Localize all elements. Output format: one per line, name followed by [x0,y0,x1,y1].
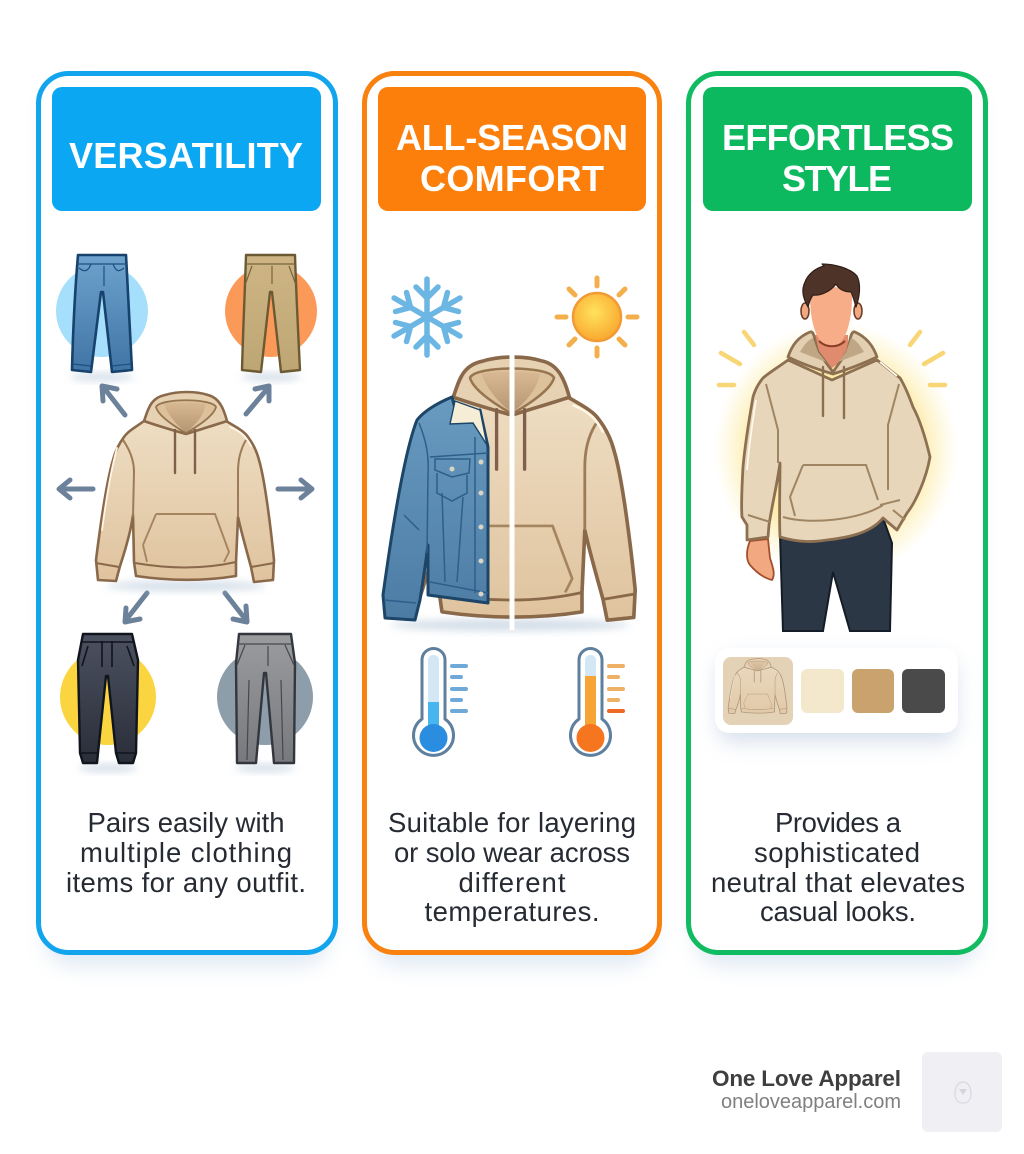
brand name: One Love Apparel [712,1066,901,1091]
logo tile [922,1052,1002,1132]
icon: hoodie with denim jacket half [383,352,635,631]
icon: sun [557,278,637,356]
text: all-season description: temperatures. [424,896,600,927]
text: effortless description: sophisticated [754,837,920,868]
text: versatility description: items for any outfit. [66,867,306,898]
text: effortless description: Provides a [775,807,902,838]
icon: black joggers on circle [60,634,156,772]
swatch: hoodie tile [723,657,793,725]
arrow: down right [225,593,247,622]
arrow: down left [125,593,147,622]
heading: all-season comfort: ALL-SEASON [396,117,628,158]
text: versatility description [66,807,306,898]
colour swatch card [715,648,958,742]
heading: versatility: VERSATILITY [69,135,303,176]
swatch: tan [852,669,894,713]
panel: all-season comfort [364,74,660,966]
rays [719,332,945,385]
swatch: charcoal [902,669,945,713]
hand [747,539,774,580]
icon: snowflake [389,279,465,355]
heading: effortless style: STYLE [782,158,892,199]
pants [780,518,892,631]
arrow: up left [102,386,125,415]
heading: versatility [52,87,321,211]
text: versatility description: multiple clothing [80,837,292,868]
heading: all-season comfort: COMFORT [420,158,604,199]
panel: versatility [38,74,336,966]
text: effortless description: neutral that elevates [711,867,965,898]
text: versatility description: Pairs easily with [88,807,284,838]
icon: warm thermometer [570,648,623,755]
heading: effortless style [703,87,972,211]
arrow: left [59,480,93,498]
jacket left half [383,397,488,620]
text: all-season description: Suitable for layering [388,807,636,838]
panel: effortless style [688,74,986,966]
icon: central hoodie [96,392,274,591]
text: all-season description: different [458,867,566,898]
hoodie [742,360,930,542]
glow behind figure [714,322,958,578]
icon: blue jeans on circle [56,255,148,381]
brand url: oneloveapparel.com [721,1091,901,1113]
heading: all-season comfort [378,87,646,211]
icon: grey trousers on circle [217,634,313,772]
text: all-season description: or solo wear across [394,837,630,868]
arrow: up right [246,386,269,414]
heading: effortless style: EFFORTLESS [722,117,954,158]
text: effortless description [711,807,965,927]
illustration: man wearing hoodie [742,264,930,631]
icon: cold thermometer [413,648,466,755]
neck and face [801,264,862,368]
icon: khaki trousers on circle [225,255,317,381]
swatch: cream [801,669,844,713]
arrow: right [278,480,312,498]
text: all-season description [388,807,636,927]
text: effortless description: casual looks. [760,896,916,927]
